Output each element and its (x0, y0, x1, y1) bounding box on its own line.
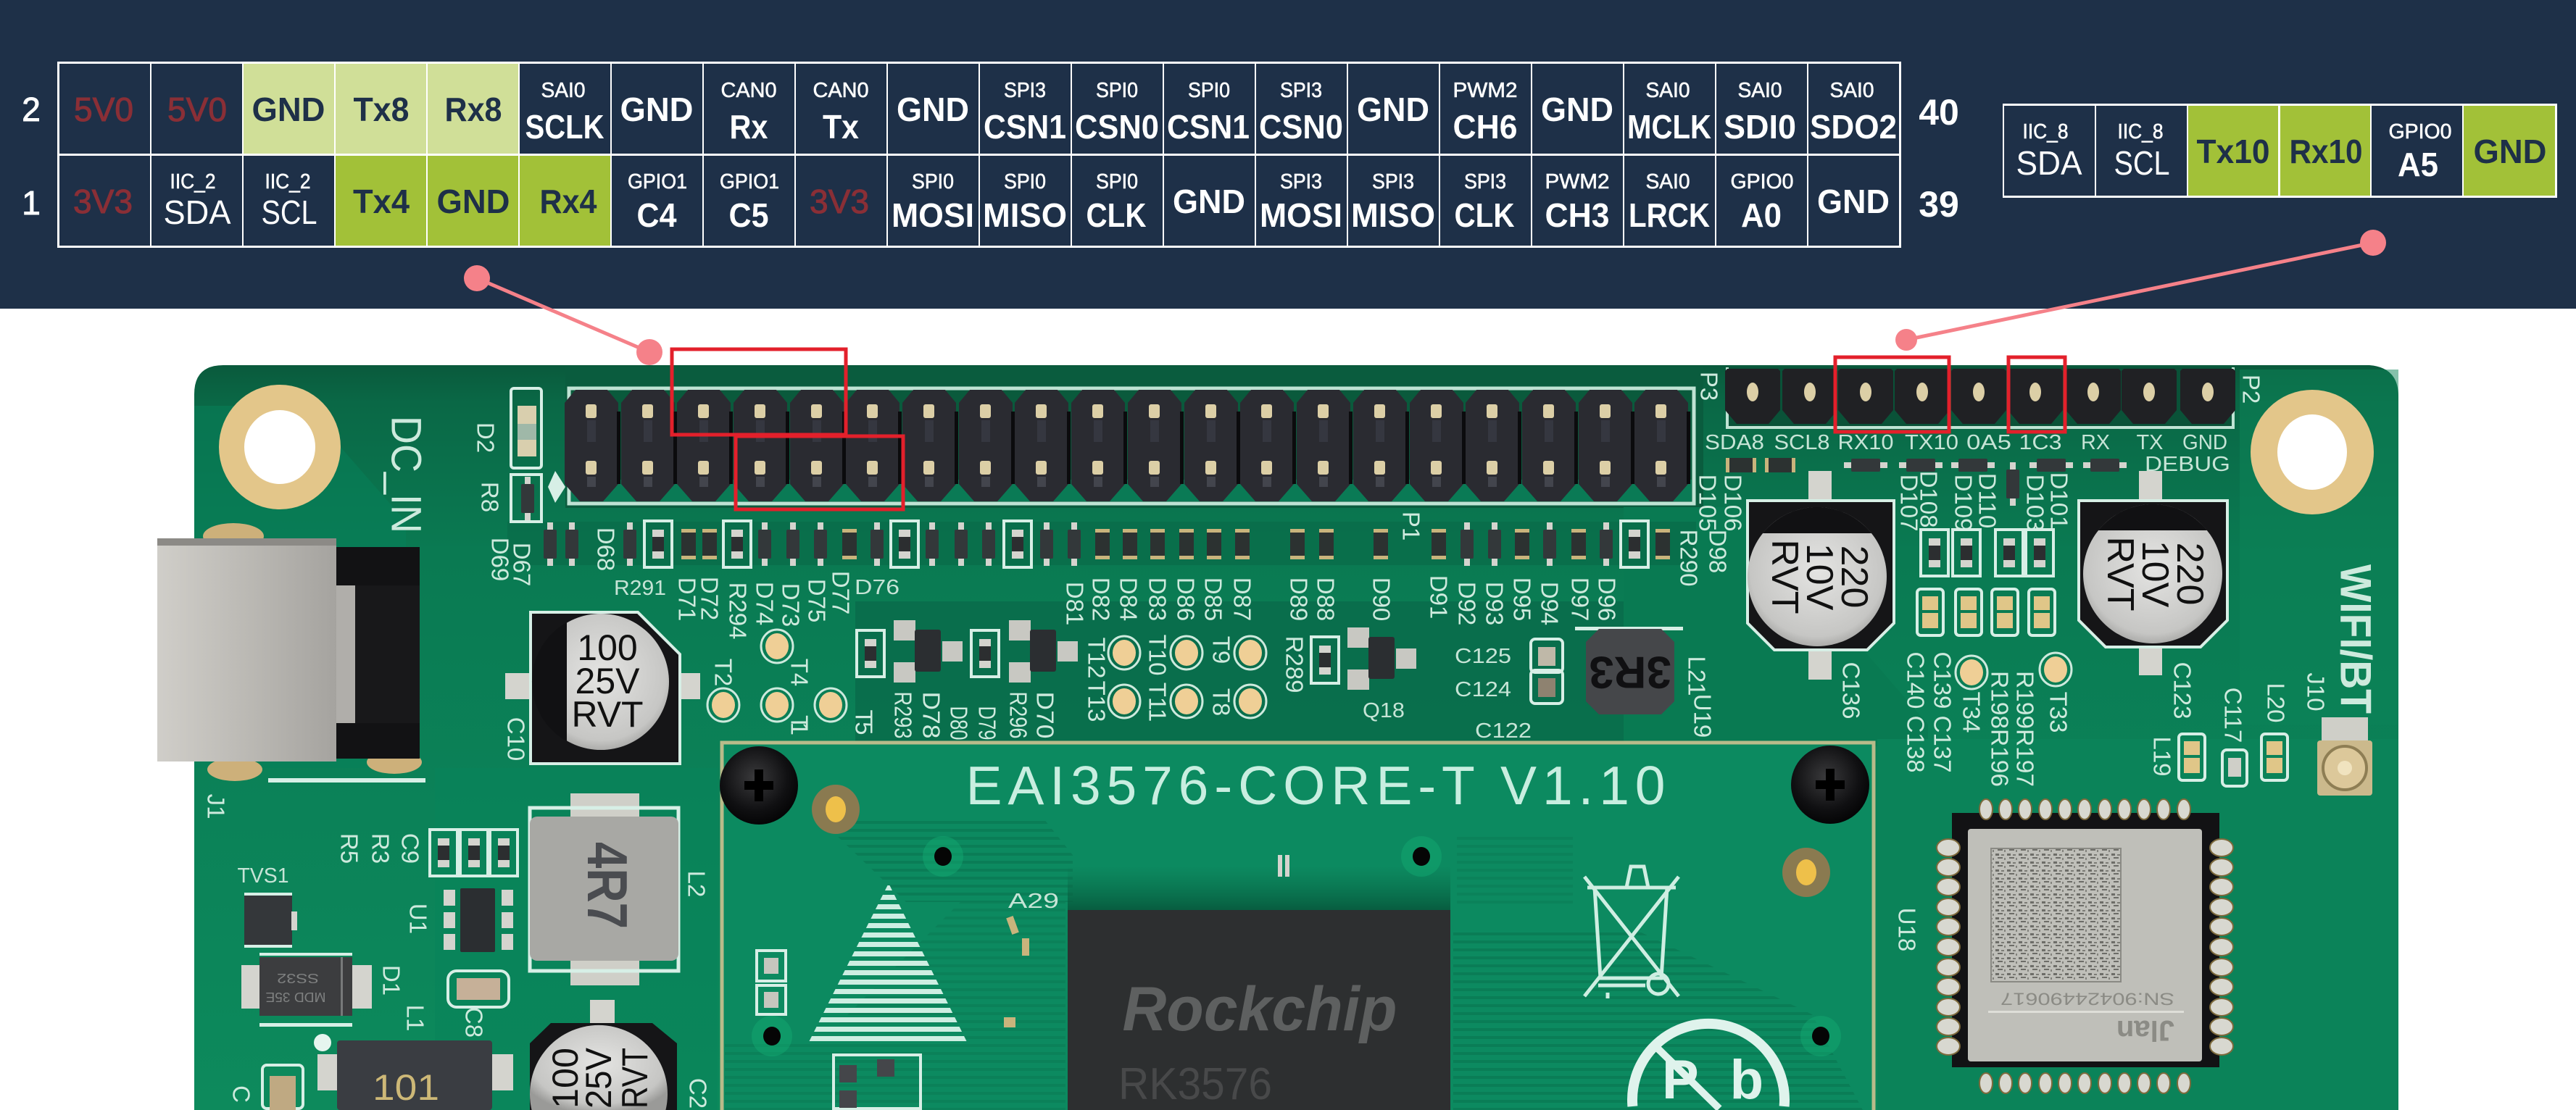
row 2 to 40: SAI0 (1645, 79, 1690, 102)
row 2 to 40: CAN0 (720, 79, 777, 102)
D-series labels at right: D108 (1915, 471, 1943, 527)
test pad labels: D80 (945, 706, 973, 740)
copper pour shading (194, 367, 2398, 1110)
test pad labels: T13 (1083, 681, 1110, 722)
silk labels around capacitors: J10 (2302, 672, 2330, 712)
test pad labels: R296 (1005, 691, 1032, 739)
callout: left header highlight top row (672, 349, 846, 435)
silk labels under P1: R290 (1676, 530, 1702, 586)
6-pin table: Tx10 (2196, 133, 2270, 170)
P3 pin labels: P3 (1696, 372, 1722, 401)
gold pad left (812, 785, 860, 834)
label A29: A29 (1008, 890, 1059, 913)
D-series labels at right: D107 (1896, 475, 1922, 531)
row 2 to 40: Tx (823, 108, 859, 146)
silk labels around capacitors: R198R196 (1986, 671, 2014, 787)
row number 39: 39 (1919, 184, 1959, 225)
capacitor C136 220uF: RVT (1763, 539, 1806, 614)
vendor mark: Jlan (2116, 1014, 2174, 1046)
row number 2: 2 (22, 91, 41, 128)
arrow: right table to header (1895, 230, 2386, 351)
trace hatching (725, 819, 1863, 1110)
silk labels under P1: D82 (1087, 577, 1115, 621)
6-pin table: SCL (2114, 144, 2170, 182)
inductor 3R3: 3R3 (1589, 646, 1671, 697)
silk labels around capacitors: L19 (2148, 736, 2176, 777)
silk labels under P1: D73 (777, 583, 805, 627)
QR and print block (1991, 848, 2121, 982)
row 1 to 39: IIC_2 (265, 170, 310, 193)
left lower parts (228, 793, 712, 1110)
row 2 to 40: SPI0 (1188, 79, 1230, 102)
silk labels under P1: D68 (593, 527, 619, 571)
inductor 3R3 (1575, 627, 1683, 714)
row 2 to 40: MCLK (1627, 108, 1711, 146)
labels R5 R3 C9: R5 (336, 833, 362, 864)
capacitor C123 220uF (2079, 471, 2227, 675)
silk labels under P1: D92 (1454, 582, 1480, 625)
test pad labels: T10 (1144, 635, 1171, 675)
silk labels under P1 (473, 422, 1747, 639)
silk labels under P1: D90 (1368, 577, 1395, 621)
test pad labels: T5 (851, 710, 877, 735)
row 1 to 39: SPI0 (1096, 170, 1138, 193)
C124 C125 C122 caps (1455, 639, 1563, 743)
row 1 to 39: GND (436, 183, 510, 220)
row 2 to 40: Tx8 (354, 91, 409, 128)
labels L21 U19: L21 (1683, 656, 1711, 696)
labels R5 R3 C9: R3 (367, 833, 394, 864)
silk labels around capacitors: C139 C137 (1929, 652, 1956, 772)
table frame (57, 62, 1901, 248)
row 1 to 39 (59, 156, 1899, 246)
label TVS1: TVS1 (238, 864, 288, 888)
icon: ESD warning triangle (809, 883, 967, 1042)
row 1 to 39: GPIO1 (628, 170, 687, 193)
row 2 to 40: GND (620, 91, 693, 128)
label U1: U1 (404, 904, 432, 934)
gold pad right (1782, 848, 1830, 897)
row 1 to 39: MOSI (1260, 196, 1342, 234)
P3 pin labels: GND (2182, 431, 2227, 454)
row 2 to 40: GND (252, 91, 325, 128)
row 1 to 39: GND (1817, 183, 1890, 220)
silk labels under P1: R291 (614, 577, 666, 600)
row 2 to 40: Rx (729, 108, 768, 146)
P3 pin labels: RX10 (1838, 431, 1893, 454)
row 2 to 40: CSN0 (1075, 108, 1159, 146)
antenna connector J10 (2317, 717, 2372, 796)
row 2 to 40: GND (1541, 91, 1613, 128)
silk labels under P1: R8 (477, 482, 503, 512)
label C2: C2 (684, 1078, 712, 1109)
labels L21 U19: U19 (1689, 694, 1716, 738)
labels R5 R3 C9 (336, 833, 423, 864)
D-series labels at right: D101 (2045, 472, 2073, 529)
callout: right header highlight A5 (2008, 357, 2065, 432)
SMD row under P1 (544, 521, 1670, 567)
test pad labels: D79 (974, 706, 1000, 740)
C124 C125 C122 caps: C124 (1455, 678, 1511, 701)
silk labels under P1: D96 (1593, 577, 1621, 621)
capacitor lower 100uF: 100 (545, 1048, 586, 1109)
silk labels around capacitors: C136 (1838, 662, 1864, 719)
silk labels under P1: D76 (855, 576, 899, 599)
row 1 to 39: 3V3 (73, 183, 133, 220)
module board (722, 743, 1874, 1110)
row 2 to 40: SPI3 (1280, 79, 1322, 102)
P3 pin labels: 1C3 (2019, 431, 2061, 454)
capacitor C136 220uF (1748, 471, 1894, 680)
row 2 to 40: SAI0 (1829, 79, 1874, 102)
serial number: SN:90424490617 (2000, 988, 2174, 1009)
R5 R3 C9 components (430, 830, 518, 876)
row 2 to 40: SPI0 (1096, 79, 1138, 102)
row 1 to 39: LRCK (1629, 196, 1710, 234)
P3 pin labels: SCL8 (1774, 431, 1829, 454)
main 40-pin table (57, 62, 1901, 248)
arrow: left table to header (464, 265, 662, 365)
test pad labels (786, 635, 1235, 740)
USB-C connector (157, 523, 425, 783)
icon: crossed-out recycling bin (1584, 867, 1679, 998)
row 2 to 40: Rx8 (445, 91, 502, 128)
inductor 101 (314, 1034, 513, 1110)
silk labels under P1: D81 (1061, 582, 1089, 625)
row 1 to 39: Tx4 (353, 183, 410, 220)
P3 pin labels: P2 (2238, 375, 2264, 404)
row 1 to 39: CLK (1454, 196, 1515, 234)
silk labels around capacitors: T34 (1958, 692, 1985, 733)
headers P3 and P2 (1725, 369, 2235, 424)
SoC chip Rockchip RK3576: RK3576 (1118, 1059, 1272, 1109)
row 2 to 40: SAI0 (541, 79, 586, 102)
label WIFI/BT: WIFI/BT (2331, 564, 2380, 714)
row 2 to 40: CSN0 (1259, 108, 1343, 146)
row 2 to 40: CSN1 (1167, 108, 1250, 146)
row number 40: 40 (1919, 92, 1959, 133)
silk labels around capacitors (1838, 652, 2330, 787)
labels D1 L1 C8 (378, 965, 487, 1038)
labels D1 L1 C8: D1 (378, 965, 404, 996)
row 1 to 39: C5 (729, 196, 768, 234)
row 1 to 39: PWM2 (1545, 170, 1609, 193)
silk labels under P1: D83 (1144, 577, 1171, 621)
row 1 to 39: MISO (1351, 196, 1435, 234)
silk labels under P1: D67 (509, 543, 535, 586)
capacitor C10 100uF: 100 (577, 627, 638, 668)
silk labels under P1: D69 (487, 538, 513, 581)
SoC chip Rockchip RK3576: Rockchip (1122, 975, 1397, 1044)
row 1 to 39: SPI3 (1372, 170, 1414, 193)
label J1: J1 (203, 794, 229, 819)
mounting vias (752, 836, 1841, 1056)
capacitor C136 220uF: 220 (1833, 546, 1875, 608)
P3 pin labels: TX10 (1905, 431, 1958, 454)
label L2: L2 (683, 871, 710, 897)
row 1 to 39: SDA (164, 193, 231, 231)
row 1 to 39: Rx4 (539, 183, 597, 220)
silk labels under P1: D77 (828, 571, 854, 614)
transistors (857, 620, 1416, 690)
test pad labels: T12 (1083, 638, 1110, 678)
test pad labels: R293 (890, 691, 916, 739)
row 2 to 40: GND (897, 91, 969, 128)
small parts left of SoC (757, 855, 1289, 1109)
silk labels under P1: D94 (1537, 582, 1563, 625)
row 2 to 40: SDI0 (1724, 108, 1796, 146)
board outline (194, 365, 2398, 1110)
module pads (1937, 799, 2233, 1093)
silk labels under P1: D106 (1719, 475, 1747, 531)
P3 pin labels (1696, 372, 2264, 476)
row 2 to 40: 5V0 (74, 91, 133, 128)
module rim (722, 743, 1874, 1110)
row 2 to 40: 5V0 (167, 91, 227, 128)
D-series labels at right: D109 (1950, 475, 1977, 531)
test pad labels: T9 (1208, 636, 1235, 664)
screw left (720, 746, 798, 825)
inductor 4R7 (530, 793, 678, 985)
silk labels under P1: R294 (725, 583, 751, 639)
panel: dark header band (0, 0, 2576, 309)
row 2 to 40: SAI0 (1738, 79, 1782, 102)
label C10: C10 (503, 717, 529, 761)
row 2 to 40: CH6 (1453, 108, 1518, 146)
label C stub: C (228, 1085, 255, 1103)
row 1 to 39: MISO (983, 196, 1067, 234)
D-series labels at right: D103 (2022, 475, 2048, 531)
row 2 to 40: SPI3 (1004, 79, 1046, 102)
capacitor C136 220uF: 10V (1798, 543, 1840, 611)
module frame (1952, 813, 2219, 1067)
inductor 101: 101 (373, 1067, 439, 1108)
LED D2 and resistor R8 (511, 388, 541, 522)
row 2 to 40: SDO2 (1810, 108, 1897, 146)
label U18: U18 (1893, 908, 1921, 951)
row 2 to 40: PWM2 (1453, 79, 1518, 102)
silk labels under P1: D71 (674, 577, 700, 621)
row 1 to 39: GPIO0 (1731, 170, 1793, 193)
silk labels under P1: D75 (803, 579, 831, 622)
mounting hole left (219, 385, 341, 509)
callout: right header highlight Tx10 Rx10 (1835, 357, 1949, 432)
header P1 silk frame (569, 388, 1694, 504)
silk labels around capacitors: T33 (2045, 692, 2072, 733)
diode D1 SS32: MDD 35E (266, 990, 325, 1004)
capacitor lower 100uF: 25V (578, 1047, 619, 1109)
WiFi module U18 (1937, 799, 2233, 1093)
test pad labels: T11 (1144, 683, 1171, 722)
row 1 to 39: SPI3 (1280, 170, 1322, 193)
silk labels under P1: P1 (1397, 512, 1425, 541)
row 1 to 39: C4 (636, 196, 677, 234)
mounting hole right (2251, 390, 2374, 514)
silk labels under P1: D88 (1312, 577, 1339, 621)
row 2 to 40: CSN1 (984, 108, 1066, 146)
SoC chip Rockchip RK3576 (1068, 910, 1450, 1110)
6-pin table: GPIO0 (2389, 120, 2451, 143)
capacitor lower-left (262, 1065, 303, 1110)
header P3 silk frame (1727, 367, 2233, 427)
silk labels under P1: D93 (1482, 582, 1508, 625)
silk labels under P1: D87 (1229, 577, 1255, 621)
silk labels under P1: D84 (1115, 577, 1142, 621)
row 2 to 40 (59, 64, 1899, 154)
labels R289 and Q18 (1281, 636, 1405, 722)
panel: core module (720, 743, 1874, 1110)
silk labels under P1: D95 (1509, 577, 1535, 621)
row 1 to 39: GPIO1 (720, 170, 779, 193)
row 2 to 40: CAN0 (813, 79, 868, 102)
callout: left header highlight bottom row (736, 436, 903, 509)
label DC_IN: DC_IN (383, 416, 429, 533)
labels L21 U19 (1683, 656, 1716, 738)
labels D1 L1 C8: L1 (402, 1005, 429, 1031)
6-pin table (2003, 104, 2557, 198)
row 1 to 39: SPI3 (1464, 170, 1506, 193)
rule line (1988, 1011, 2184, 1013)
row 1 to 39: CH3 (1545, 196, 1609, 234)
capacitor lower 100uF (530, 1000, 677, 1110)
row 2 to 40: GND (1357, 91, 1429, 128)
test pad labels: T8 (1208, 688, 1235, 716)
row number 1: 1 (22, 184, 41, 222)
D-series labels at right (1896, 471, 2073, 531)
6-pin table: Rx10 (2289, 133, 2363, 170)
row 1 to 39: GND (1173, 183, 1245, 220)
core title: EAI3576-CORE-T V1.10 (965, 755, 1666, 816)
row 1 to 39: 3V3 (810, 183, 869, 220)
capacitor C10 100uF: RVT (571, 694, 644, 735)
P1 pin-1 marker (548, 471, 565, 503)
U1 regulator (444, 888, 513, 952)
silk labels under P1: D74 (751, 582, 778, 625)
capacitor C123 220uF: 220 (2169, 543, 2211, 605)
shield can (1968, 829, 2202, 1061)
silk labels under P1: D86 (1173, 577, 1199, 621)
capacitor lower 100uF: RVT (615, 1048, 655, 1109)
small chips and gold pads beside capacitors (1917, 530, 2072, 689)
small diodes below P3 (1726, 458, 2127, 506)
TVS1 chip (244, 893, 297, 948)
silk labels around capacitors: L20 (2263, 683, 2289, 723)
P3 pin labels: DEBUG (2145, 453, 2230, 476)
labels R289 and Q18: Q18 (1363, 699, 1405, 722)
test pad labels: D70 (1032, 691, 1058, 739)
silk labels under P1: D72 (696, 577, 723, 620)
6-pin table: A5 (2398, 146, 2438, 183)
row 1 to 39: SCL (261, 193, 317, 231)
diode D1 SS32 (241, 953, 372, 1027)
6-pin table: SDA (2016, 144, 2082, 182)
gold pads L19 L20 and cap C117 (2179, 734, 2288, 786)
D-series labels at right: D110 (1974, 473, 2000, 528)
row 1 to 39: A0 (1741, 196, 1782, 234)
screw right (1791, 746, 1869, 824)
silk labels under P1: D98 (1705, 530, 1731, 573)
silk labels around capacitors: C117 (2219, 688, 2247, 743)
P3 pin labels: RX (2081, 431, 2110, 454)
icon: lead-free Pb circle (1632, 1024, 1784, 1110)
6-pin table: IIC_8 (2022, 120, 2069, 143)
diode D1 SS32: SS32 (277, 971, 319, 985)
icon: lead-free Pb circle: Pb (1662, 1049, 1763, 1110)
6-pin table: IIC_8 (2118, 120, 2163, 143)
silk labels under P1: D105 (1695, 475, 1721, 531)
silk labels around capacitors: R199R197 (2012, 671, 2038, 787)
labels D1 L1 C8: C8 (461, 1007, 487, 1038)
capacitor C123 220uF: RVT (2099, 536, 2141, 612)
silk labels under P1: D85 (1200, 577, 1226, 621)
C124 C125 C122 caps: C122 (1475, 719, 1532, 743)
row 1 to 39: CLK (1086, 196, 1147, 234)
silk labels under P1: D2 (473, 422, 499, 453)
panel: PCB board (157, 365, 2398, 1110)
labels R289 and Q18: R289 (1281, 636, 1308, 693)
silk labels under P1: D91 (1425, 575, 1453, 619)
capacitor C10 100uF: 25V (576, 661, 640, 701)
capacitor C10 100uF (505, 612, 700, 764)
capacitor C8 (448, 971, 509, 1007)
silk labels under P1: D89 (1286, 577, 1312, 621)
row 1 to 39: SAI0 (1645, 170, 1690, 193)
label T4: T4 (786, 659, 813, 686)
test pad labels: T1 (786, 715, 813, 735)
P3 pin labels: SDA8 (1705, 431, 1764, 454)
silk labels around capacitors: C140 C138 (1902, 652, 1929, 772)
label T2: T2 (710, 659, 736, 686)
labels R5 R3 C9: C9 (397, 833, 423, 864)
silk labels around capacitors: C123 (2169, 662, 2196, 719)
6-pin table: GND (2473, 133, 2547, 170)
test pad labels: D78 (918, 691, 945, 739)
P3 pin labels: 0A5 (1966, 431, 2011, 454)
row 1 to 39: MOSI (892, 196, 974, 234)
C124 C125 C122 caps: C125 (1455, 645, 1511, 668)
capacitor C123 220uF: 10V (2134, 541, 2176, 608)
row 1 to 39: SPI0 (1004, 170, 1046, 193)
test pads (707, 630, 1266, 722)
inductor 4R7: 4R7 (576, 842, 639, 929)
header P1 40-pin connector (565, 390, 1690, 501)
row 2 to 40: SCLK (525, 108, 604, 146)
row 1 to 39: IIC_2 (170, 170, 216, 193)
row 1 to 39: SPI0 (912, 170, 954, 193)
silk labels under P1: D97 (1567, 577, 1593, 621)
P3 pin labels: TX (2137, 431, 2163, 454)
